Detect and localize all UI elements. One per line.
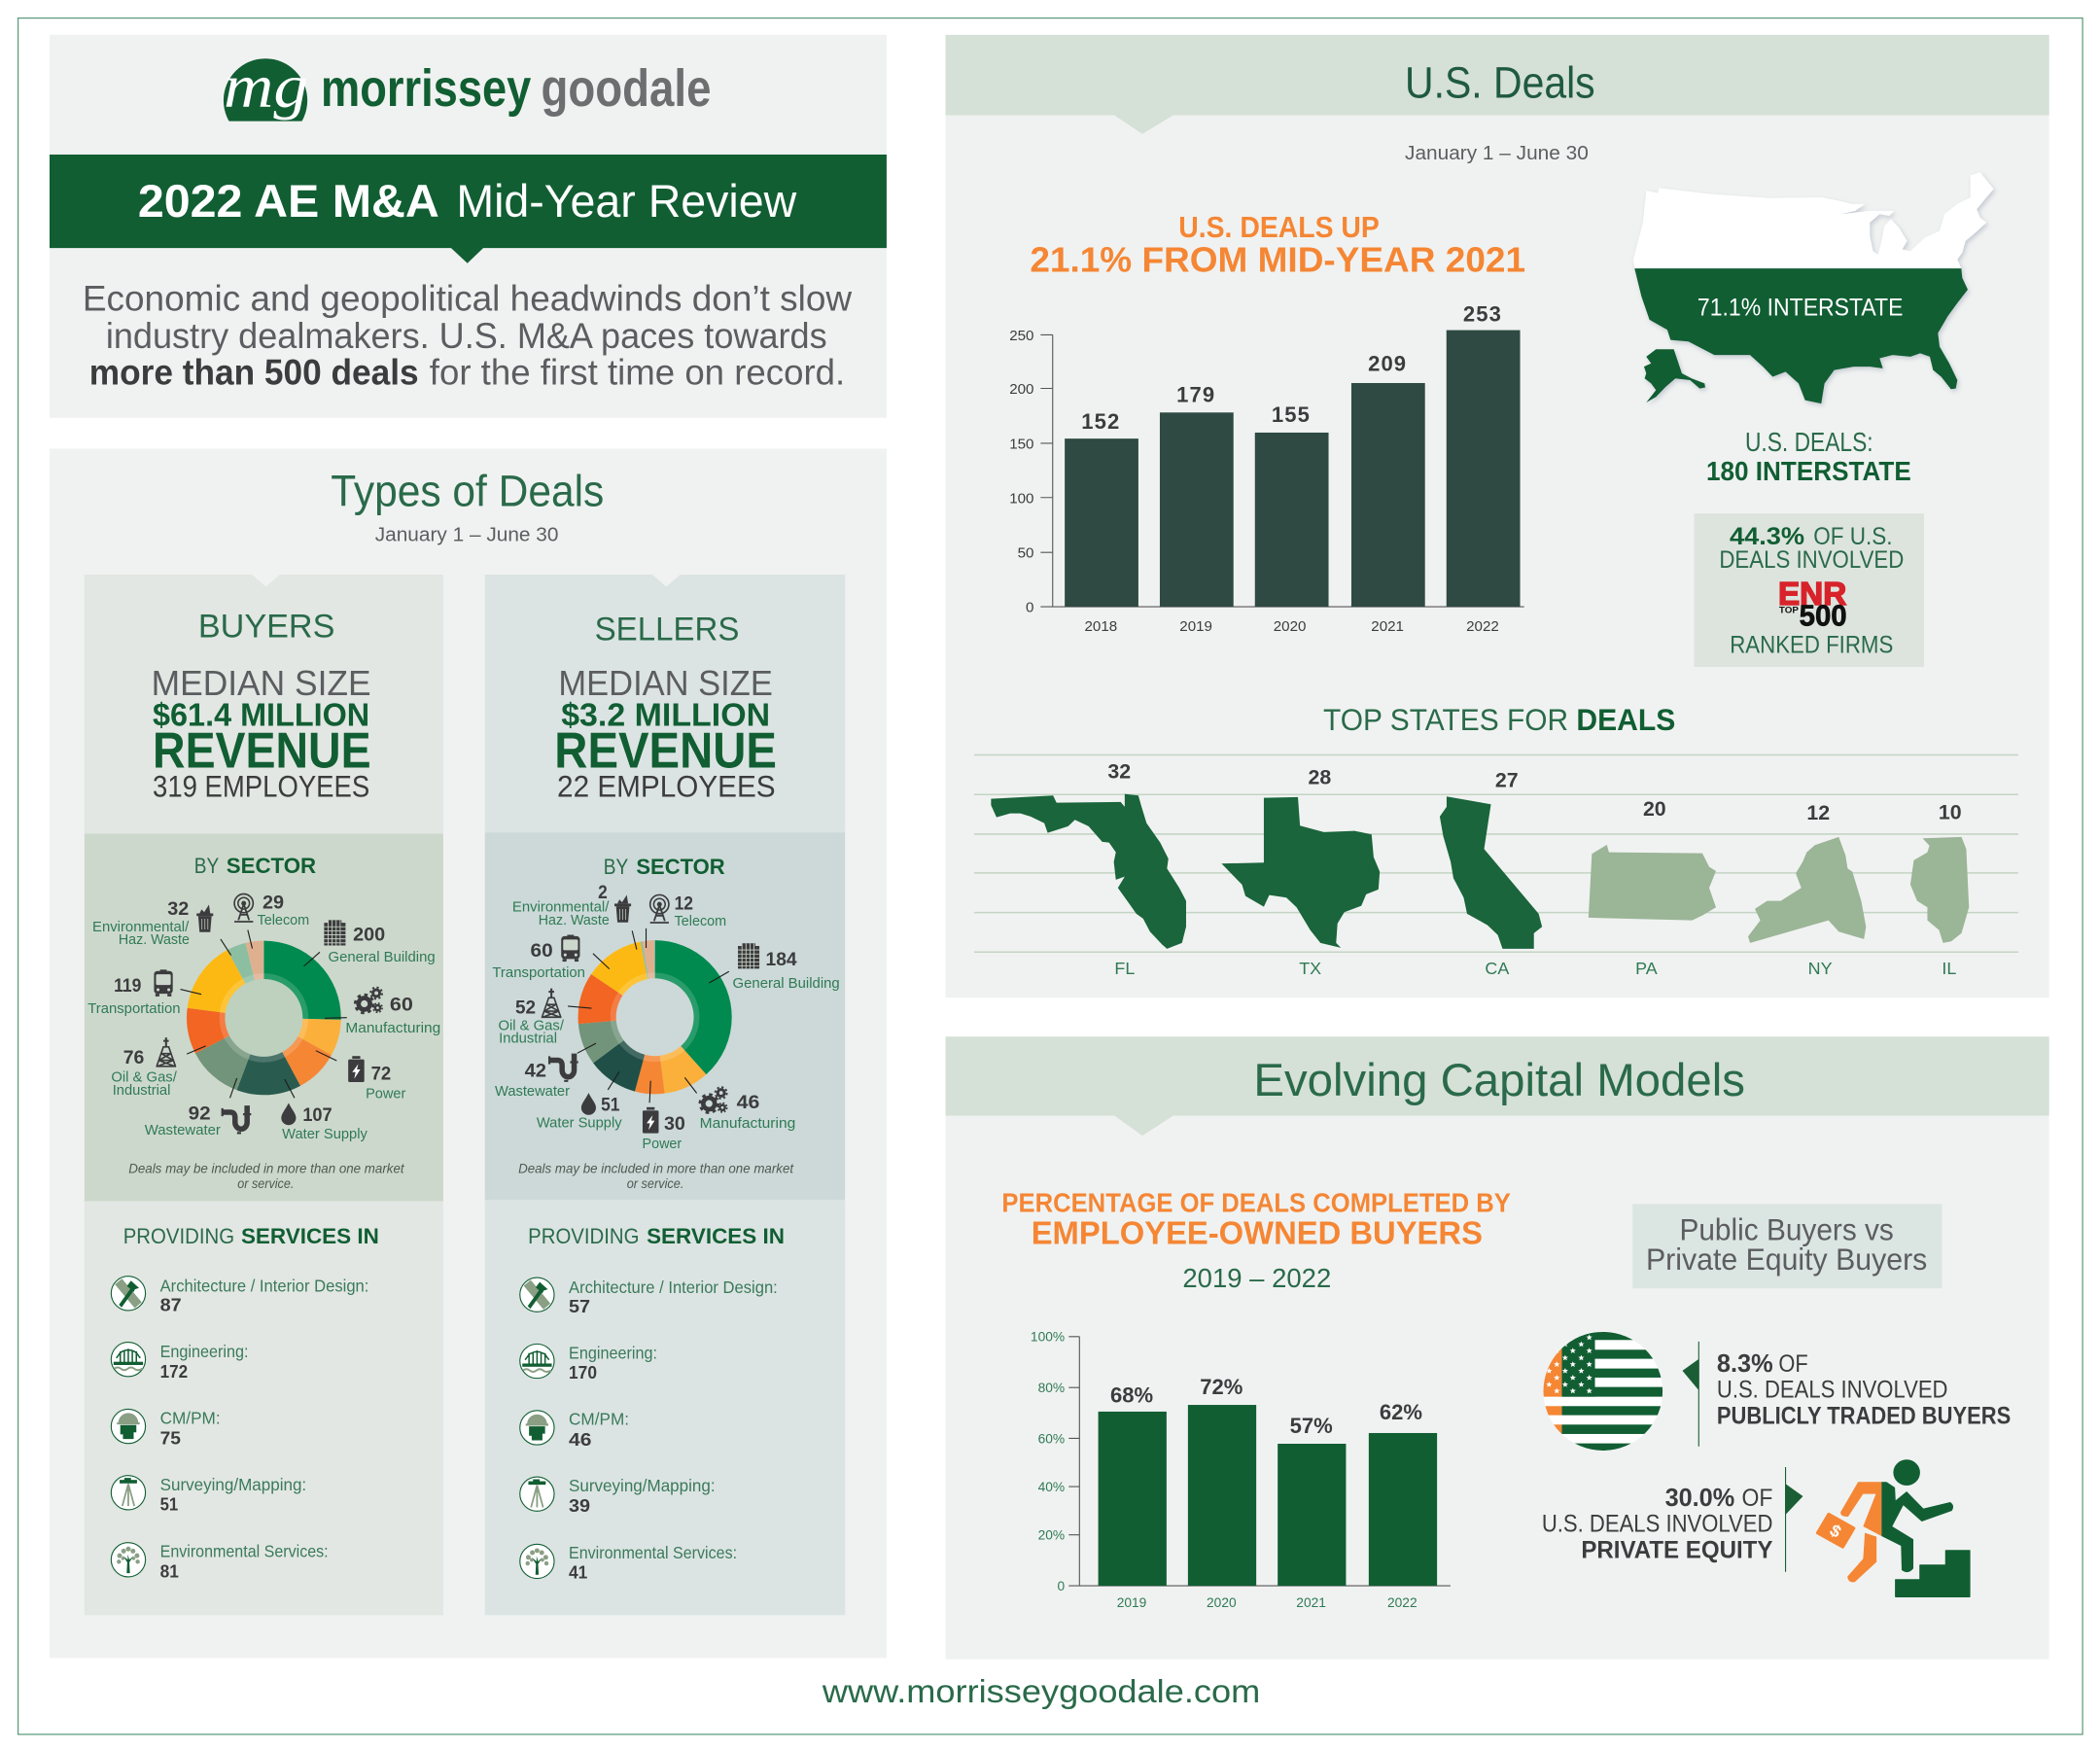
bar chart: employee-owned buyers: 57% — [1290, 1414, 1333, 1438]
sector label: water supply — [537, 1093, 622, 1131]
heading: types of deals: Types of Deals — [331, 467, 604, 516]
chart: top states pictogram — [991, 759, 1969, 978]
service row: surveying — [520, 1476, 716, 1516]
heading: providing services — [528, 1224, 785, 1248]
icon: running businessman — [1815, 1459, 1970, 1596]
sector label: manufacturing: 46 — [737, 1093, 760, 1113]
bar chart: employee-owned buyers: 2021 — [1296, 1595, 1326, 1610]
buyers headline stats — [152, 609, 371, 804]
service row: engineering: Engineering: — [160, 1342, 249, 1361]
sector label: water supply: Water Supply — [282, 1127, 368, 1142]
column: buyers — [85, 575, 443, 1615]
chart: top states pictogram: TX — [1299, 959, 1321, 978]
service row: architecture: 57 — [569, 1296, 590, 1316]
sector label: telecom — [234, 893, 309, 928]
buyers headline stats: REVENUE — [153, 722, 371, 779]
callout: ENR top 500: DEALS INVOLVED — [1719, 547, 1904, 574]
footnote: Deals may be included in more than one market — [128, 1162, 405, 1176]
heading: providing services — [123, 1224, 379, 1248]
sector label: environmental: 32 — [167, 899, 189, 920]
sector label: oil and gas: Oil & Gas/ — [111, 1069, 178, 1085]
sector label: transportation — [492, 935, 585, 981]
sector label: environmental: Environmental/ — [92, 920, 190, 935]
bar chart: U.S. deals by year: 2020 — [1274, 618, 1306, 635]
sellers headline stats: 22 EMPLOYEES — [557, 769, 776, 804]
sector label: oil and gas: Oil & Gas/ — [498, 1018, 565, 1033]
header band: U.S. deals: U.S. Deals — [1405, 58, 1595, 108]
intro paragraph: Economic and geopolitical headwinds don’t slow — [83, 278, 852, 319]
chart: top states pictogram: 32 — [1107, 759, 1131, 783]
sector label: transportation — [88, 969, 181, 1017]
bar chart: U.S. deals by year: 100 — [1009, 490, 1033, 507]
logo: ENR: ENR — [1778, 577, 1846, 612]
buyers headline stats: 319 EMPLOYEES — [153, 769, 369, 804]
panel: U.S. deals — [946, 35, 2049, 998]
bar chart: U.S. deals by year: 0 — [1026, 600, 1033, 616]
bar chart: employee-owned buyers: 40% — [1038, 1480, 1065, 1494]
heading: top states: DEALS — [1576, 702, 1675, 737]
buyers headline stats: MEDIAN SIZE — [152, 664, 371, 703]
service row: architecture: 87 — [160, 1295, 182, 1315]
sellers headline stats: MEDIAN SIZE — [558, 664, 773, 703]
sellers headline stats: $3.2 MILLION — [561, 698, 770, 734]
logo: goodale — [542, 59, 711, 118]
sector label: oil and gas: Industrial — [113, 1083, 170, 1099]
sellers headline stats — [554, 611, 777, 804]
panel: types of deals — [50, 448, 887, 1658]
bar chart: U.S. deals by year: 209 — [1368, 352, 1407, 376]
intro paragraph: for the first time on record. — [430, 351, 845, 392]
service row: surveying: Surveying/Mapping: — [160, 1475, 306, 1494]
footnote — [128, 1162, 405, 1191]
bar chart: U.S. deals by year: 50 — [1018, 545, 1033, 562]
heading: by sector: SECTOR — [227, 854, 316, 878]
stat: interstate deals: U.S. DEALS: — [1745, 427, 1873, 457]
service row: engineering — [111, 1342, 249, 1382]
sector label: manufacturing: 60 — [390, 995, 413, 1015]
headline: employee-owned buyers: EMPLOYEE-OWNED BUYERS — [1032, 1216, 1483, 1252]
bar chart: U.S. deals by year: 150 — [1009, 436, 1033, 452]
footnote: Deals may be included in more than one market — [518, 1162, 794, 1176]
service row: cm/pm: 46 — [569, 1429, 591, 1450]
chart: top states pictogram: 12 — [1806, 801, 1830, 824]
logo: mg — [224, 52, 308, 121]
sector label: manufacturing — [345, 988, 440, 1036]
header band: evolving capital models — [946, 1036, 2049, 1136]
label box: public vs private — [1632, 1204, 1942, 1288]
bar chart: U.S. deals by year: 200 — [1009, 381, 1033, 398]
sector label: telecom: Telecom — [675, 914, 726, 929]
sector label: transportation: Transportation — [88, 1001, 181, 1017]
sector label: oil and gas — [498, 989, 565, 1047]
service row: environmental — [520, 1543, 737, 1583]
service row: cm/pm: 75 — [160, 1428, 181, 1449]
intro paragraph: industry dealmakers. U.S. M&A paces towards — [106, 315, 827, 356]
sector label: environmental — [92, 899, 213, 948]
logo: morrissey — [321, 59, 531, 118]
header band: U.S. deals — [946, 35, 2049, 134]
service row: environmental: 81 — [160, 1560, 179, 1581]
heading: top states: TOP STATES FOR — [1323, 702, 1568, 737]
intro paragraph — [83, 278, 852, 392]
sector label: environmental — [512, 883, 631, 928]
bar chart: employee-owned buyers: 2020 — [1207, 1595, 1237, 1610]
bar chart: U.S. deals by year: 155 — [1272, 402, 1311, 427]
sector label: general building: 184 — [766, 950, 797, 970]
heading: providing services: SERVICES IN — [241, 1224, 379, 1248]
stat: private equity: OF — [1742, 1486, 1772, 1512]
sector label: power — [348, 1056, 406, 1102]
heading: providing services: PROVIDING — [123, 1224, 234, 1248]
map: U.S. interstate share — [1633, 172, 1994, 403]
sector label: wastewater — [495, 1054, 578, 1100]
callout: ENR top 500: RANKED FIRMS — [1730, 633, 1893, 659]
bar chart: employee-owned buyers: 0 — [1057, 1579, 1065, 1593]
sector label: oil and gas — [111, 1037, 178, 1099]
chart: top states pictogram: FL — [1114, 959, 1135, 978]
service row: environmental: Environmental Services: — [160, 1541, 329, 1560]
title banner: 2022 AE M&A — [138, 176, 439, 227]
headline: deals up: 21.1% FROM MID-YEAR 2021 — [1030, 241, 1525, 280]
sellers headline stats: SELLERS — [595, 611, 739, 648]
marker: public buyers divider — [1682, 1342, 1699, 1447]
sector label: power: Power — [643, 1137, 682, 1152]
sector label: environmental: Environmental/ — [512, 900, 610, 916]
bar chart: U.S. deals by year: 2021 — [1371, 618, 1404, 635]
sector label: environmental: 2 — [598, 883, 608, 903]
sector label: water supply: Water Supply — [537, 1115, 622, 1131]
sector label: wastewater: 42 — [525, 1061, 546, 1081]
title banner — [50, 155, 887, 263]
panel: header intro — [50, 35, 887, 418]
bar chart: employee-owned buyers: 72% — [1200, 1375, 1243, 1399]
chart: top states pictogram: 27 — [1495, 768, 1519, 791]
chart: top states pictogram: 28 — [1309, 766, 1331, 789]
sector label: oil and gas: Industrial — [499, 1032, 557, 1047]
chart: top states pictogram: NY — [1808, 959, 1833, 978]
donut chart: sellers by sector — [597, 960, 713, 1074]
service row: architecture: Architecture / Interior Design: — [160, 1277, 368, 1296]
footnote: or service. — [627, 1176, 683, 1191]
label box: public vs private: Private Equity Buyers — [1646, 1242, 1927, 1277]
sector label: wastewater — [145, 1104, 251, 1138]
sector label: general building — [733, 943, 840, 992]
bar chart: U.S. deals by year: 152 — [1081, 409, 1120, 434]
headline: employee-owned buyers: 2019 – 2022 — [1182, 1263, 1331, 1293]
callout: ENR top 500: 44.3% — [1730, 524, 1804, 550]
logo: ENR: TOP — [1779, 606, 1799, 616]
bar chart: U.S. deals by year: 253 — [1463, 302, 1502, 327]
bar chart: employee-owned buyers: 20% — [1038, 1527, 1065, 1542]
stat: private equity: U.S. DEALS INVOLVED — [1542, 1512, 1772, 1538]
stat: publicly traded buyers: 8.3% — [1717, 1348, 1773, 1378]
bar chart: employee-owned buyers: 2022 — [1387, 1595, 1418, 1610]
sector label: oil and gas: 52 — [515, 998, 536, 1018]
header band: evolving capital models: Evolving Capital Models — [1253, 1055, 1745, 1105]
bar chart: employee-owned buyers — [1031, 1330, 1451, 1610]
sector label: general building: General Building — [733, 976, 840, 992]
headline: employee-owned buyers — [1001, 1188, 1511, 1293]
service row: cm/pm: CM/PM: — [160, 1408, 221, 1427]
headline: deals up — [1030, 212, 1525, 280]
sector label: environmental: Haz. Waste — [119, 932, 190, 948]
sector label: transportation: 60 — [531, 941, 553, 962]
stat: publicly traded buyers: OF — [1778, 1351, 1808, 1378]
footnote — [518, 1162, 794, 1191]
sector label: power — [643, 1107, 685, 1152]
service row: cm/pm: CM/PM: — [569, 1410, 629, 1429]
footer url: www.morrisseygoodale.com — [822, 1674, 1260, 1710]
stat: interstate deals — [1706, 427, 1911, 486]
sector label: manufacturing: Manufacturing — [700, 1116, 795, 1132]
service row: architecture: Architecture / Interior Design: — [569, 1278, 778, 1297]
sector label: telecom: 29 — [262, 893, 284, 914]
sector label: power: 72 — [371, 1064, 391, 1084]
stat: private equity — [1542, 1483, 1773, 1563]
date range: January 1 – June 30 — [375, 524, 558, 546]
sector label: telecom: 12 — [675, 893, 693, 914]
bar chart: U.S. deals by year: 250 — [1009, 328, 1033, 344]
service row: surveying: 51 — [160, 1493, 178, 1514]
sector label: telecom — [650, 893, 726, 929]
service row: environmental: 41 — [569, 1562, 587, 1583]
chart: top states pictogram: IL — [1942, 959, 1956, 978]
heading: providing services: SERVICES IN — [647, 1224, 785, 1248]
bar chart: U.S. deals by year: 2019 — [1179, 618, 1212, 635]
sector label: water supply — [281, 1103, 368, 1142]
buyers headline stats: $61.4 MILLION — [153, 698, 369, 734]
service row: engineering: 172 — [160, 1361, 188, 1382]
headline: deals up: U.S. DEALS UP — [1178, 212, 1380, 244]
date range: January 1 – June 30 — [1405, 142, 1589, 164]
sector label: general building: 200 — [353, 926, 385, 946]
headline: employee-owned buyers: PERCENTAGE OF DEALS COMPLETED BY — [1001, 1188, 1511, 1218]
map: U.S. interstate share: 71.1% INTERSTATE — [1698, 295, 1903, 321]
sector label: power: Power — [366, 1087, 406, 1102]
sector label: wastewater: 92 — [189, 1104, 211, 1125]
sector label: wastewater: Wastewater — [145, 1123, 221, 1138]
sector label: power: 30 — [664, 1114, 685, 1135]
sellers headline stats: REVENUE — [554, 722, 777, 779]
panel: evolving capital models — [946, 1036, 2049, 1660]
stat: publicly traded buyers — [1717, 1348, 2011, 1429]
marker: private equity divider — [1785, 1467, 1802, 1572]
bar chart: U.S. deals by year: 179 — [1176, 382, 1215, 406]
bar chart: U.S. deals by year: 2022 — [1466, 618, 1499, 635]
bar chart: employee-owned buyers: 2019 — [1117, 1595, 1146, 1610]
sector label: manufacturing — [700, 1087, 795, 1132]
service row: surveying: Surveying/Mapping: — [569, 1476, 716, 1495]
service row: engineering: Engineering: — [569, 1344, 657, 1363]
sector label: oil and gas: 76 — [123, 1048, 145, 1068]
heading: by sector: BY — [604, 855, 628, 879]
bar chart: U.S. deals by year — [1009, 302, 1524, 635]
column: sellers — [485, 575, 845, 1615]
stat: publicly traded buyers: PUBLICLY TRADED BUYERS — [1717, 1403, 2011, 1429]
icon: running businessman: $ — [1827, 1521, 1844, 1542]
bar chart: employee-owned buyers: 80% — [1038, 1381, 1065, 1395]
chart: top states pictogram: 20 — [1643, 797, 1666, 821]
chart: top states pictogram: CA — [1485, 959, 1509, 978]
logo: ENR: 500 — [1800, 601, 1847, 633]
service row: cm/pm — [520, 1410, 629, 1450]
service row: architecture — [111, 1277, 368, 1315]
bar chart: employee-owned buyers: 62% — [1380, 1400, 1422, 1424]
service row: environmental: Environmental Services: — [569, 1543, 737, 1562]
callout: ENR top 500 — [1694, 513, 1924, 667]
heading: by sector: SECTOR — [636, 855, 725, 879]
bar chart: U.S. deals by year: 2018 — [1085, 618, 1117, 635]
stat: private equity: PRIVATE EQUITY — [1581, 1537, 1773, 1563]
buyers headline stats: BUYERS — [198, 609, 334, 646]
intro paragraph: more than 500 deals — [89, 351, 419, 392]
sector label: environmental: Haz. Waste — [539, 913, 610, 928]
logo — [224, 58, 710, 122]
service row: engineering: 170 — [569, 1362, 597, 1382]
service row: environmental — [111, 1541, 329, 1581]
callout: ENR top 500: OF U.S. — [1813, 524, 1892, 550]
chart: top states pictogram: 10 — [1939, 801, 1962, 824]
bar chart: employee-owned buyers: 100% — [1031, 1330, 1065, 1345]
label box: public vs private: Public Buyers vs — [1679, 1212, 1894, 1247]
sector label: telecom: Telecom — [257, 913, 309, 928]
stat: private equity: 30.0% — [1665, 1483, 1734, 1512]
heading: by sector: BY — [194, 854, 219, 878]
heading: providing services: PROVIDING — [528, 1224, 640, 1248]
sector label: transportation: Transportation — [492, 965, 585, 981]
stat: interstate deals: 180 INTERSTATE — [1706, 456, 1911, 486]
footnote: or service. — [237, 1176, 294, 1191]
service row: surveying — [111, 1475, 306, 1514]
service row: engineering — [520, 1344, 657, 1382]
logo: ENR — [1778, 577, 1847, 633]
sector label: water supply: 107 — [302, 1105, 332, 1126]
bar chart: employee-owned buyers: 60% — [1038, 1431, 1065, 1446]
sector label: wastewater: Wastewater — [495, 1084, 570, 1100]
stat: publicly traded buyers: U.S. DEALS INVOLVED — [1717, 1378, 1948, 1404]
sector label: manufacturing: Manufacturing — [345, 1021, 440, 1036]
sector label: water supply: 51 — [601, 1096, 620, 1116]
service row: cm/pm — [111, 1408, 221, 1449]
sector label: transportation: 119 — [114, 976, 141, 997]
icon: U.S. flag — [1540, 1330, 1667, 1452]
sector label: general building: General Building — [329, 950, 436, 965]
service row: architecture — [520, 1278, 778, 1316]
service row: surveying: 39 — [569, 1495, 590, 1516]
donut chart: buyers by sector — [206, 960, 322, 1075]
title banner: Mid-Year Review — [456, 176, 796, 227]
bar chart: employee-owned buyers: 68% — [1110, 1382, 1153, 1407]
sector label: general building — [324, 920, 436, 965]
chart: top states pictogram: PA — [1635, 959, 1658, 978]
